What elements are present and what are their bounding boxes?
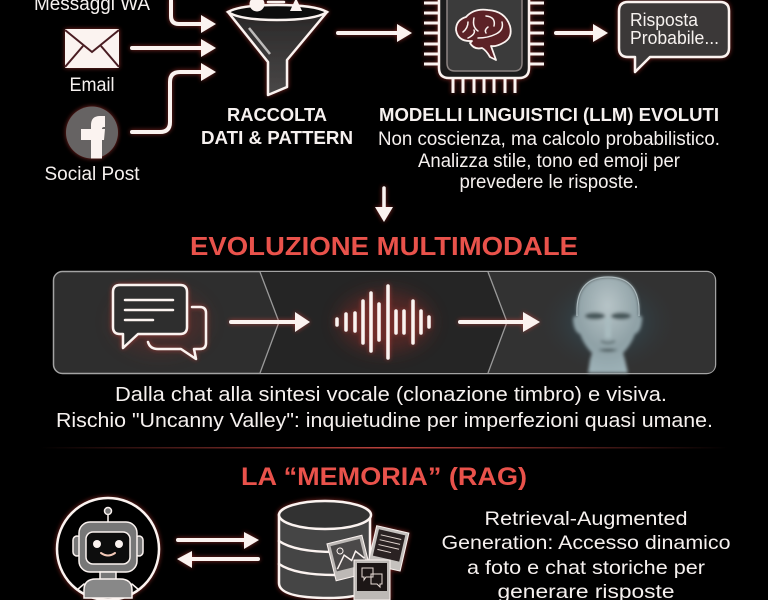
- text: multimodal description: Rischio "Uncanny Valley": inquietudine per imperfezioni quasi umane.: [56, 410, 713, 432]
- speech bubble: risposta probabile: Risposta: [630, 10, 699, 30]
- icon: processor with brain: [424, 0, 544, 93]
- text: descrizione LLM: [378, 129, 720, 193]
- text: retrieval description: Generation: Accesso dinamico: [442, 532, 731, 554]
- panel: multimodal flow: [54, 270, 716, 374]
- text: descrizione LLM: prevedere le risposte.: [460, 172, 638, 193]
- text: descrizione LLM: Non coscienza, ma calcolo probabilistico.: [378, 129, 720, 150]
- image: holographic face: [538, 270, 678, 374]
- label: Social Post: Social Post: [44, 164, 140, 185]
- text: multimodal description: [56, 384, 713, 432]
- photo: landscape: [327, 535, 371, 581]
- photo: chat: [354, 560, 390, 600]
- document: notes: [368, 526, 409, 571]
- icon: sound wave: [337, 286, 429, 358]
- text: descrizione LLM: Analizza stile, tono ed emoji per: [418, 151, 681, 172]
- icon: database with documents: [279, 501, 409, 600]
- text: multimodal description: Dalla chat alla sintesi vocale (clonazione timbro) e visiva.: [115, 384, 667, 406]
- text: retrieval description: [442, 508, 731, 600]
- icon: funnel: [228, 0, 327, 95]
- text: retrieval description: Retrieval-Augmented: [484, 508, 688, 530]
- heading: raccolta dati e pattern: [201, 104, 353, 148]
- arrow: funnel to chip: [338, 24, 412, 42]
- text: retrieval description: a foto e chat storiche per: [467, 557, 706, 579]
- icon: facebook circle: [66, 106, 118, 158]
- icon: chat bubbles: [113, 285, 206, 359]
- arrow: chat to voice: [231, 312, 310, 332]
- arrow: chip to response: [556, 24, 608, 42]
- arrows: robot and database exchange: [177, 532, 259, 568]
- arrow: voice to face: [460, 312, 540, 332]
- heading: modelli linguistici: MODELLI LINGUISTICI (LLM) EVOLUTI: [379, 104, 719, 125]
- arrow: down: [375, 188, 393, 222]
- heading: raccolta dati e pattern: RACCOLTA: [227, 104, 327, 125]
- speech bubble: risposta probabile: Probabile...: [630, 28, 719, 48]
- icon: email envelope: [65, 29, 119, 68]
- heading: la memoria rag: LA “MEMORIA” (RAG): [241, 463, 527, 491]
- icon: robot in circle: [57, 498, 159, 600]
- label: Email: Email: [70, 75, 114, 96]
- heading: raccolta dati e pattern: DATI & PATTERN: [201, 127, 353, 148]
- arrows: sources to funnel: [132, 0, 216, 132]
- speech bubble: risposta probabile: [619, 2, 729, 72]
- heading: evoluzione multimodale: EVOLUZIONE MULTIMODALE: [190, 231, 578, 261]
